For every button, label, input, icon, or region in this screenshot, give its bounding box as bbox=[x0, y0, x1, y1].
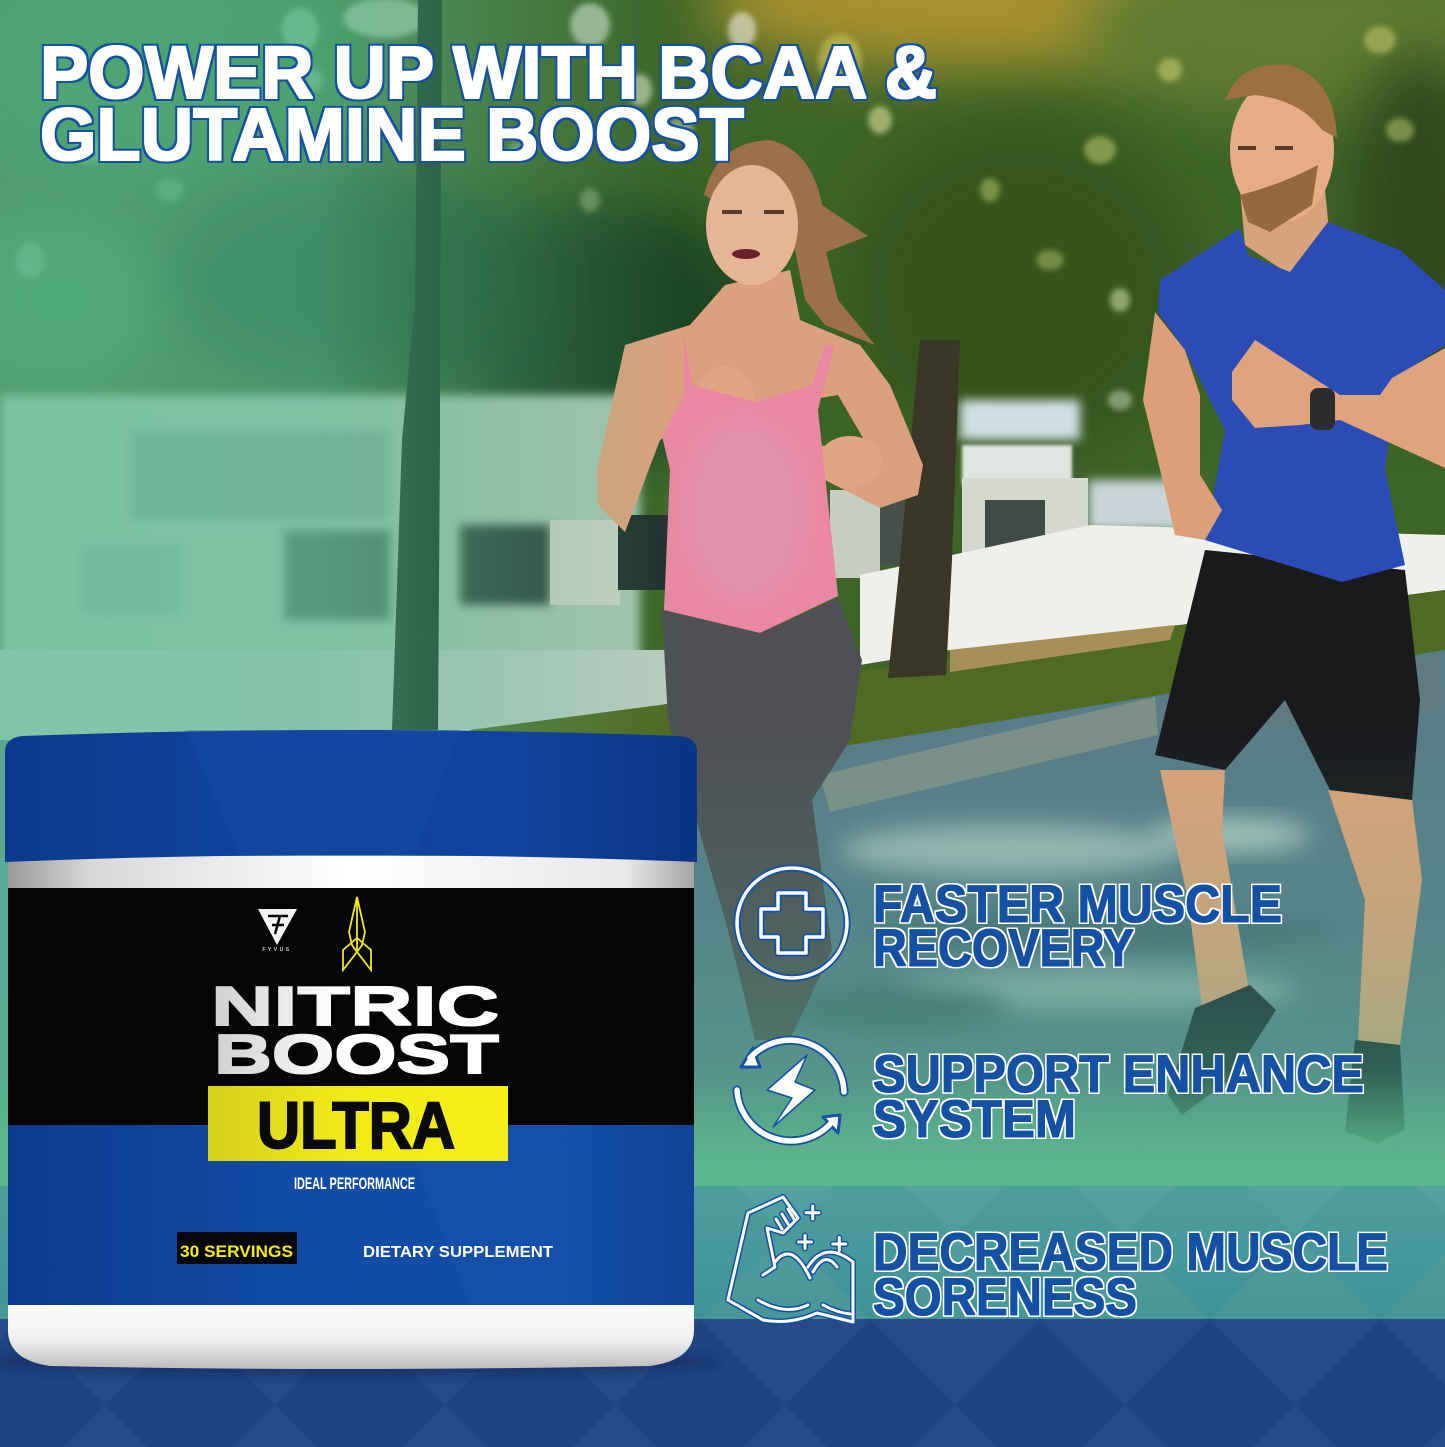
white path bbox=[860, 525, 1445, 665]
neck bbox=[1240, 190, 1330, 275]
pink tank top bbox=[662, 332, 838, 633]
benefit text bbox=[873, 1045, 1364, 1149]
tagline: IDEAL PERFORMANCE bbox=[294, 1174, 415, 1193]
sunlit leaf dapples bbox=[16, 0, 1414, 410]
icon: flexed arm bbox=[728, 1197, 853, 1322]
benefit text: RECOVERY bbox=[873, 919, 1134, 978]
benefit: faster muscle recovery bbox=[737, 868, 1282, 978]
navy base band with diamond pattern bbox=[0, 1186, 1445, 1447]
benefit text: SORENESS bbox=[873, 1268, 1137, 1327]
blue t-shirt bbox=[1158, 222, 1445, 582]
benefit text: DECREASED MUSCLE bbox=[873, 1223, 1388, 1282]
servings badge bbox=[177, 1232, 297, 1264]
label: black upper section bbox=[8, 888, 694, 1126]
fists bbox=[695, 366, 882, 488]
yellow rocket logo bbox=[343, 897, 371, 970]
black shorts bbox=[1155, 550, 1420, 800]
watch bbox=[1310, 388, 1335, 430]
shoes bbox=[1168, 985, 1276, 1115]
title bbox=[40, 31, 937, 176]
dietary supplement text: DIETARY SUPPLEMENT bbox=[363, 1244, 553, 1261]
beard bbox=[1240, 165, 1318, 232]
foliage backdrop bbox=[0, 0, 1445, 760]
product jar bbox=[0, 730, 720, 1376]
face details bbox=[1238, 146, 1293, 150]
benefit: support enhance system bbox=[737, 1040, 1364, 1149]
jar neck bbox=[8, 856, 694, 892]
benefit text: FASTER MUSCLE bbox=[873, 875, 1282, 934]
white jar base bbox=[8, 1296, 694, 1369]
right forearm bbox=[1232, 340, 1445, 468]
brand logo: FYVUS bbox=[258, 909, 297, 953]
product name: NITRIC bbox=[211, 975, 499, 1037]
legs bbox=[1160, 770, 1248, 1030]
blue lid bbox=[5, 730, 697, 862]
teal band behind third benefit bbox=[0, 1186, 1445, 1320]
grass strip bbox=[470, 590, 1445, 760]
servings badge: 30 SERVINGS bbox=[180, 1242, 293, 1261]
icon: lightning with circular arrows bbox=[737, 1040, 844, 1141]
green colour overlay: bottom bbox=[0, 730, 1445, 1200]
benefit text: SUPPORT ENHANCE bbox=[873, 1045, 1364, 1104]
icon: medical cross in circle bbox=[737, 868, 847, 978]
jar shadow bbox=[0, 1348, 720, 1376]
product name: BOOST bbox=[214, 1023, 499, 1085]
ULTRA banner: ULTRA bbox=[257, 1088, 455, 1162]
face bbox=[706, 165, 798, 285]
benefit: decreased muscle soreness bbox=[728, 1197, 1388, 1327]
arms and torso skin bbox=[597, 270, 923, 532]
benefit text bbox=[873, 875, 1282, 978]
product name bbox=[211, 975, 499, 1085]
runner: man bbox=[1143, 64, 1445, 1143]
hair bbox=[1225, 64, 1337, 138]
leggings bbox=[662, 598, 862, 1040]
background buildings and wall bbox=[0, 395, 1198, 660]
hair bbox=[704, 140, 875, 345]
brand logo: FYVUS: FYVUS bbox=[262, 947, 292, 953]
label: blue lower section bbox=[8, 1125, 694, 1305]
title: GLUTAMINE BOOST bbox=[40, 93, 744, 176]
left arm bbox=[1143, 312, 1222, 540]
head bbox=[1230, 78, 1334, 222]
runner: woman bbox=[597, 140, 923, 1040]
benefit text: SYSTEM bbox=[873, 1090, 1076, 1149]
title: POWER UP WITH BCAA & bbox=[40, 31, 937, 114]
tree trunks bbox=[392, 0, 960, 730]
paved walkway bbox=[0, 650, 1445, 1447]
face details bbox=[722, 210, 784, 214]
benefit text bbox=[873, 1223, 1388, 1327]
